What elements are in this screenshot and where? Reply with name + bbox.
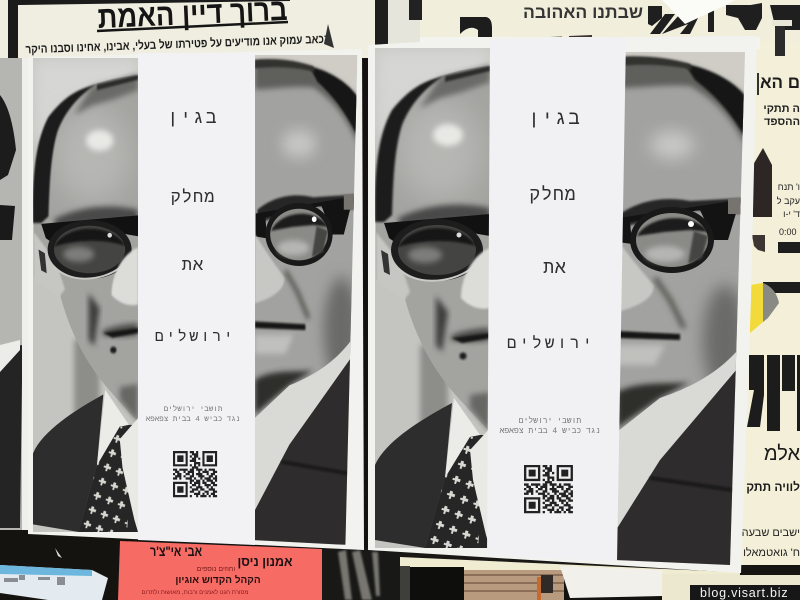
poster 2 slogan: את [543,259,567,279]
notice text: בכאב עמוק אנו מודיעים על פטירתו של בעלי, אבינו, אחינו וסבנו היקר [25,32,331,56]
torn black letters [648,3,800,34]
poster 2 slogan [507,108,595,353]
poster heading: our beloved grandmother: שבתנו האהובה [523,3,643,22]
yellow scrap [750,283,763,333]
right edge stacked posters: 0:00 [779,227,797,237]
poster 2 small print: תושבי ירושלים [519,416,581,426]
poster 2 small print [500,416,600,436]
poster 2 small print: נגד כביש 4 בבית צפאפא [500,427,600,436]
poster 2 white text strip [487,37,626,562]
right edge stacked posters: עקב ל [777,196,800,206]
poster 2 slogan: מחלק [529,184,577,206]
right edge stacked posters: ח' גואטמאלו [743,546,800,559]
right edge stacked posters: ה תתקי [763,103,800,115]
poster 1 small print: תושבי ירושלים [164,404,223,414]
pink concert flyer [118,541,322,600]
pink concert flyer: אבי אי"צ'ר [150,543,202,559]
poster 1 slogan [155,109,235,346]
poster 2 portrait left half [375,48,490,548]
right edge stacked posters: אלמ [764,443,800,465]
poster sliver far left [0,58,30,536]
large black letters [747,355,800,431]
large dark spire shape [753,148,772,217]
right edge stacked posters: ו' תנח [778,182,800,192]
poster 1 portrait left half [33,58,138,532]
poster 2 QR code [524,466,573,512]
top-left notice: obituary [0,0,420,58]
right edge stacked posters: ההספד [764,116,800,128]
blue and white flyer [0,565,108,600]
poster 1 slogan: מחלק [171,188,215,208]
poster 1 QR code [173,452,217,496]
poster 1 portrait right half [254,55,359,545]
right edge stacked posters: ישבים שבעה [742,527,800,539]
poster 1 small print [146,404,240,424]
poster 1 slogan: את [182,257,204,276]
bottom-left black wall and flyer [0,530,125,600]
poster 2 paper [368,36,757,573]
flyer details: וחוזים נוספים [197,566,235,573]
top-right torn posters [409,0,800,56]
pink concert flyer: הקהל הקדוש אוגיון [175,574,261,586]
poster 1 white text strip [138,53,255,545]
right edge stacked posters [740,73,800,575]
poster 2 portrait right half [616,52,747,565]
poster 2 slogan: בגין [528,108,582,130]
poster 2 [368,36,757,573]
poster 1 small print: נגד כביש 4 בבית צפאפא [146,416,240,424]
poster 1 paper [28,49,364,550]
poster 1 slogan: בגין [167,109,219,129]
grey torn photo scrap [763,283,779,322]
right edge stacked posters: לוויה תתק [746,480,800,494]
watermark: blog.visart.biz [700,586,788,600]
poster 1 slogan: ירושלים [155,328,235,346]
pink concert flyer: מסורת חגנו לאמנים ורבות, מאושות ולתרום [141,588,249,596]
poster 1 [28,49,364,550]
bottom-centre wall scraps [322,548,800,600]
flyer performer names: אמנון ניסן [238,554,293,569]
right-edge text: ם הא [760,73,800,92]
right edge stacked posters: ד' י-ו [783,209,800,219]
poster 2 slogan: ירושלים [507,334,595,353]
